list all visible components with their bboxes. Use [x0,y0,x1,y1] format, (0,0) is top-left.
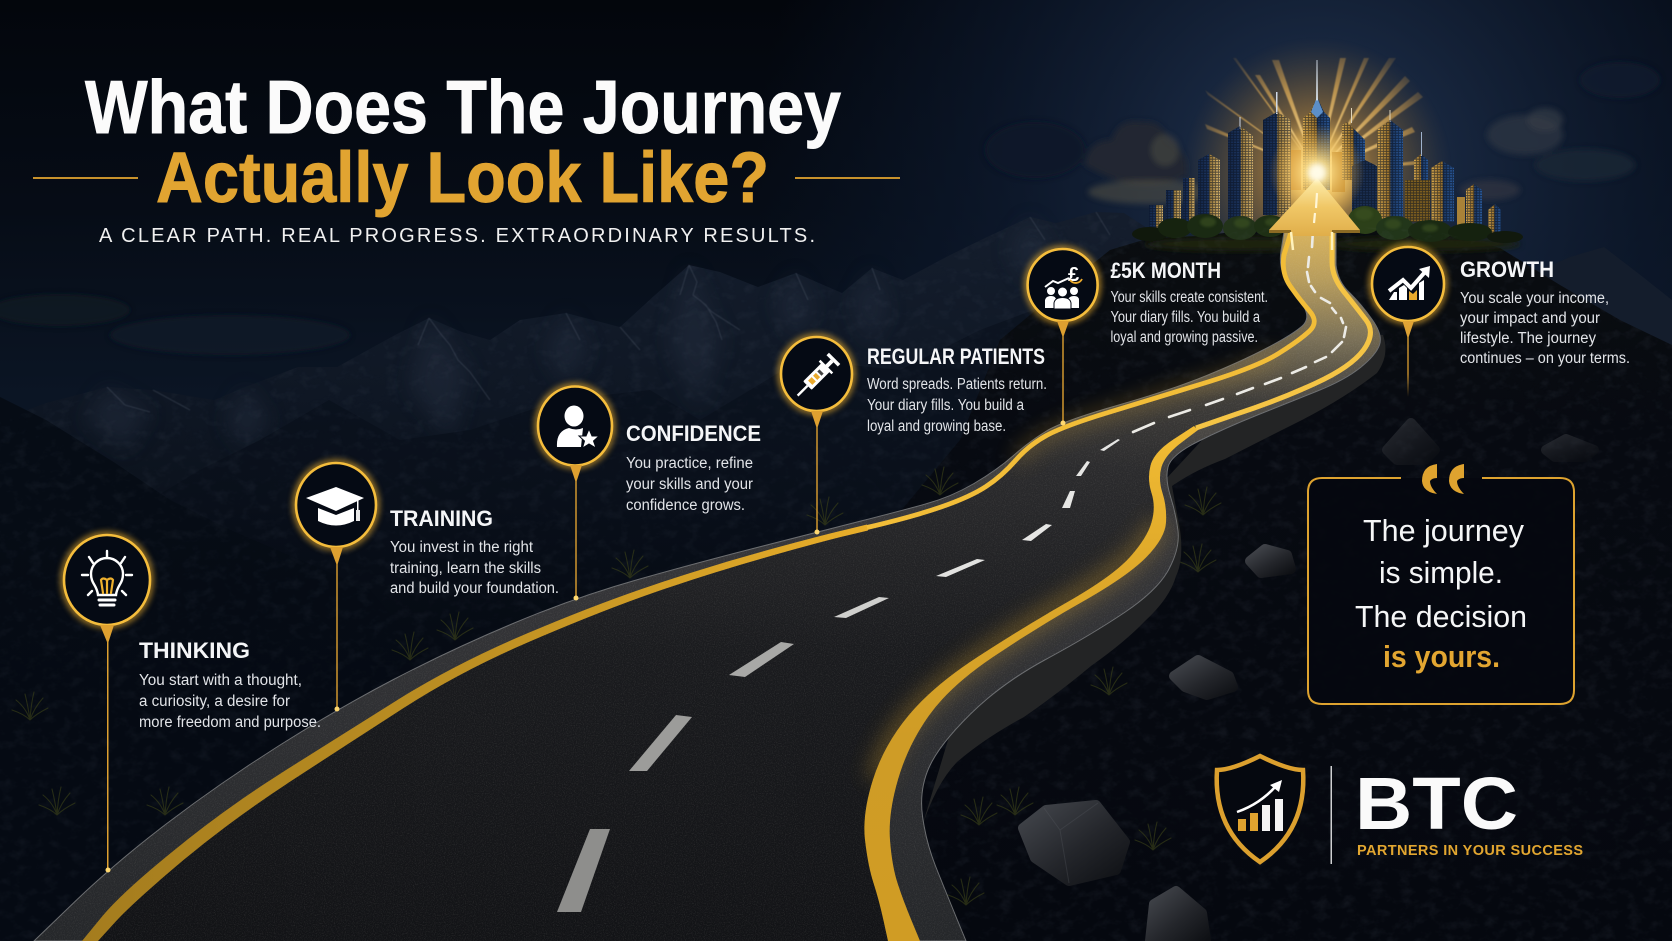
quote box [1308,478,1574,704]
icon: growth chart [1389,266,1430,300]
right yellow road line [864,232,1370,941]
golden arrow at road end [1269,165,1360,250]
heading: GROWTH [1460,257,1554,282]
description: Your diary fills. You build a [867,397,1024,414]
mid mountain range [150,240,1200,941]
treeline [1132,206,1523,251]
title rule left [33,177,138,179]
pin stem [330,547,343,709]
road centre dashes [557,230,1346,912]
step 1: thinking [64,535,321,872]
step 3: confidence [538,386,761,600]
pin circle [296,463,376,547]
description: your impact and your [1460,310,1600,327]
pin end dot [814,530,820,534]
pin end dot [574,596,578,600]
heading: REGULAR PATIENTS [867,344,1045,369]
quote callout [1308,464,1574,704]
city skyline [1140,60,1510,240]
title line 2: Actually Look Like? [156,139,769,218]
hill under the city [860,225,1672,941]
pin circle [538,386,612,466]
far right mountains [1490,247,1672,400]
description: You invest in the right [390,539,534,556]
front left ridge [0,397,420,941]
icon: person with star [557,406,599,448]
shield emblem [1217,756,1303,862]
pin glow [538,386,612,466]
mountain lit faces [85,217,1055,450]
pin stem [811,411,823,532]
icon: light bulb [82,551,132,605]
quote text: is simple. [1379,555,1503,590]
heading: TRAINING [390,506,493,531]
winding road [0,200,1400,941]
step 2: training [296,463,559,712]
description [139,672,321,731]
rocks [1023,423,1594,941]
description: lifestyle. The journey [1460,330,1596,347]
pin circle [64,535,150,625]
quote text: The journey [1363,513,1524,548]
pin circle [1028,249,1098,321]
pin glow [64,535,150,625]
grass tufts [12,467,1221,905]
step 6: growth [1372,247,1630,397]
pin stem [1402,321,1414,397]
icon: quote marks [1422,464,1464,494]
description: training, learn the skills [390,560,541,577]
description [867,376,1047,435]
title line 1: What Does The Journey [85,65,841,149]
mountain snow highlights [107,212,1110,412]
description [626,455,753,514]
road retaining wall [921,335,1385,830]
heading: CONFIDENCE [626,421,761,446]
pin end dot [1060,420,1066,426]
description: confidence grows. [626,497,745,514]
clouds around the city [0,62,1660,355]
pin glow [296,463,376,547]
icon: pound chart and people: £ [1068,264,1079,286]
title [33,65,900,247]
description: loyal and growing passive. [1110,329,1258,346]
icon: graduation cap [306,487,364,526]
description: Your skills create consistent. [1110,289,1268,306]
BTC logo [1217,756,1583,864]
pin glow [1372,247,1444,321]
quote text [1355,513,1527,674]
tagline: PARTNERS IN YOUR SUCCESS [1357,843,1583,859]
back mountain range [0,212,1200,941]
heading: £5K MONTH [1110,258,1221,283]
description: a curiosity, a desire for [139,693,290,710]
description: loyal and growing base. [867,418,1006,435]
icon: pound chart and people [1045,264,1082,309]
description: You start with a thought, [139,672,302,689]
quote text: The decision [1355,599,1527,634]
subtitle: A CLEAR PATH. REAL PROGRESS. EXTRAORDINARY RESULTS. [99,225,815,247]
description [1460,290,1630,367]
pin circle [781,337,852,411]
lower left slope [0,500,1000,941]
left yellow road line [82,232,1314,941]
description: You practice, refine [626,455,753,472]
sun rays behind city [1182,37,1452,307]
description: Your diary fills. You build a [1110,309,1260,326]
quote text: is yours. [1383,639,1500,674]
description: and build your foundation. [390,580,559,597]
description [1110,289,1268,346]
icon: syringe [791,352,841,402]
pin end dot [334,706,340,712]
road edge glow [877,354,1278,780]
pin stem [1057,321,1069,423]
wordmark: BTC [1355,762,1518,845]
heading: THINKING [139,638,250,663]
pin glow [781,337,852,411]
step 4: regular patients [781,337,1047,534]
description: Word spreads. Patients return. [867,376,1047,393]
pin stem [100,625,114,870]
divider [1330,766,1332,864]
description: your skills and your [626,476,753,493]
pin stem [570,465,582,598]
rocky ground texture [928,236,1672,941]
step 5: five k month [1028,249,1268,426]
mountain texture [4,343,908,936]
pin circle [1372,247,1444,321]
description: You scale your income, [1460,290,1609,307]
title rule right [795,177,900,179]
pin end dot [106,868,110,872]
description [390,539,559,597]
description: more freedom and purpose. [139,714,321,731]
pin glow [1028,249,1098,321]
description: continues – on your terms. [1460,350,1630,367]
